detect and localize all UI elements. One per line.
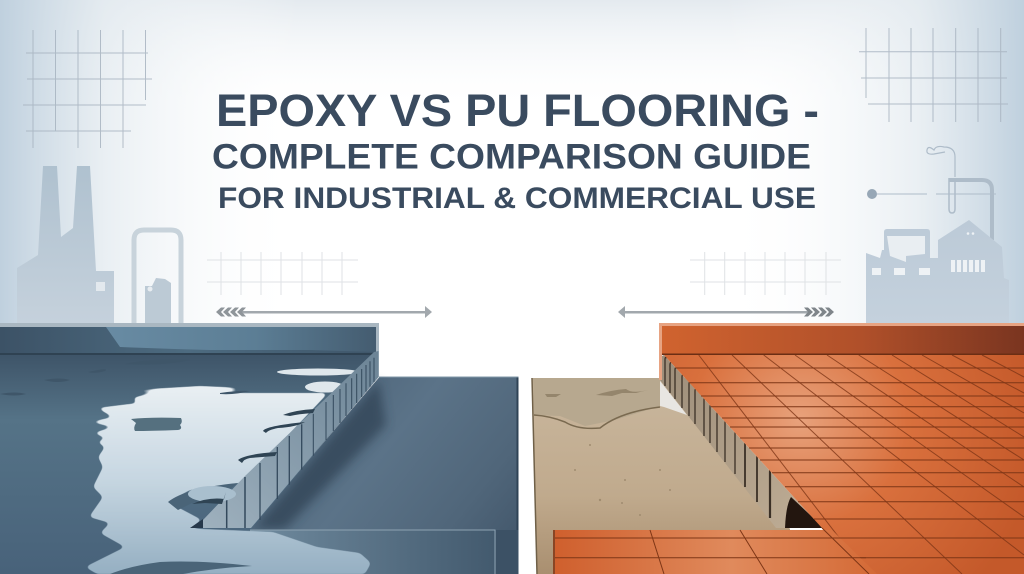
icon: left pipe loop and tank bbox=[134, 230, 181, 323]
notches along edge bbox=[238, 409, 315, 463]
icon: left small grid bbox=[207, 252, 358, 295]
icon: right small grid bbox=[690, 252, 841, 295]
front slab bbox=[250, 530, 518, 574]
title bbox=[212, 85, 819, 215]
icon: top-right blueprint grid bbox=[859, 28, 1008, 122]
icon: right factory silhouette bbox=[866, 220, 1009, 323]
title: FOR INDUSTRIAL & COMMERCIAL USE bbox=[218, 182, 816, 215]
rolled PU edge bbox=[660, 355, 822, 528]
icon: right pipework bbox=[867, 146, 996, 240]
panel: epoxy floor bbox=[0, 323, 518, 574]
icon: left factory silhouette bbox=[17, 166, 114, 323]
spilled coating main pool bbox=[85, 386, 371, 574]
orange back wall bbox=[659, 323, 1024, 380]
serrated epoxy edge bbox=[190, 351, 378, 528]
back wall bbox=[0, 323, 379, 377]
icon: top-left blueprint grid bbox=[23, 30, 152, 148]
orange tile floor bbox=[664, 355, 1024, 574]
panel: PU floor bbox=[532, 323, 1024, 574]
right lower slab bbox=[250, 377, 518, 574]
title: COMPLETE COMPARISON GUIDE bbox=[212, 138, 811, 176]
upper epoxy floor bbox=[0, 354, 378, 574]
arrow: left bbox=[216, 306, 432, 318]
dark cavity bbox=[785, 497, 824, 528]
concrete substrate bbox=[532, 378, 790, 574]
arrow: right bbox=[618, 306, 834, 318]
title: EPOXY VS PU FLOORING - bbox=[216, 85, 819, 136]
small light puddles bbox=[277, 368, 359, 392]
dark reflections on floor bbox=[0, 360, 252, 574]
front orange tile slab bbox=[553, 528, 877, 574]
blister at edge bbox=[168, 483, 238, 510]
